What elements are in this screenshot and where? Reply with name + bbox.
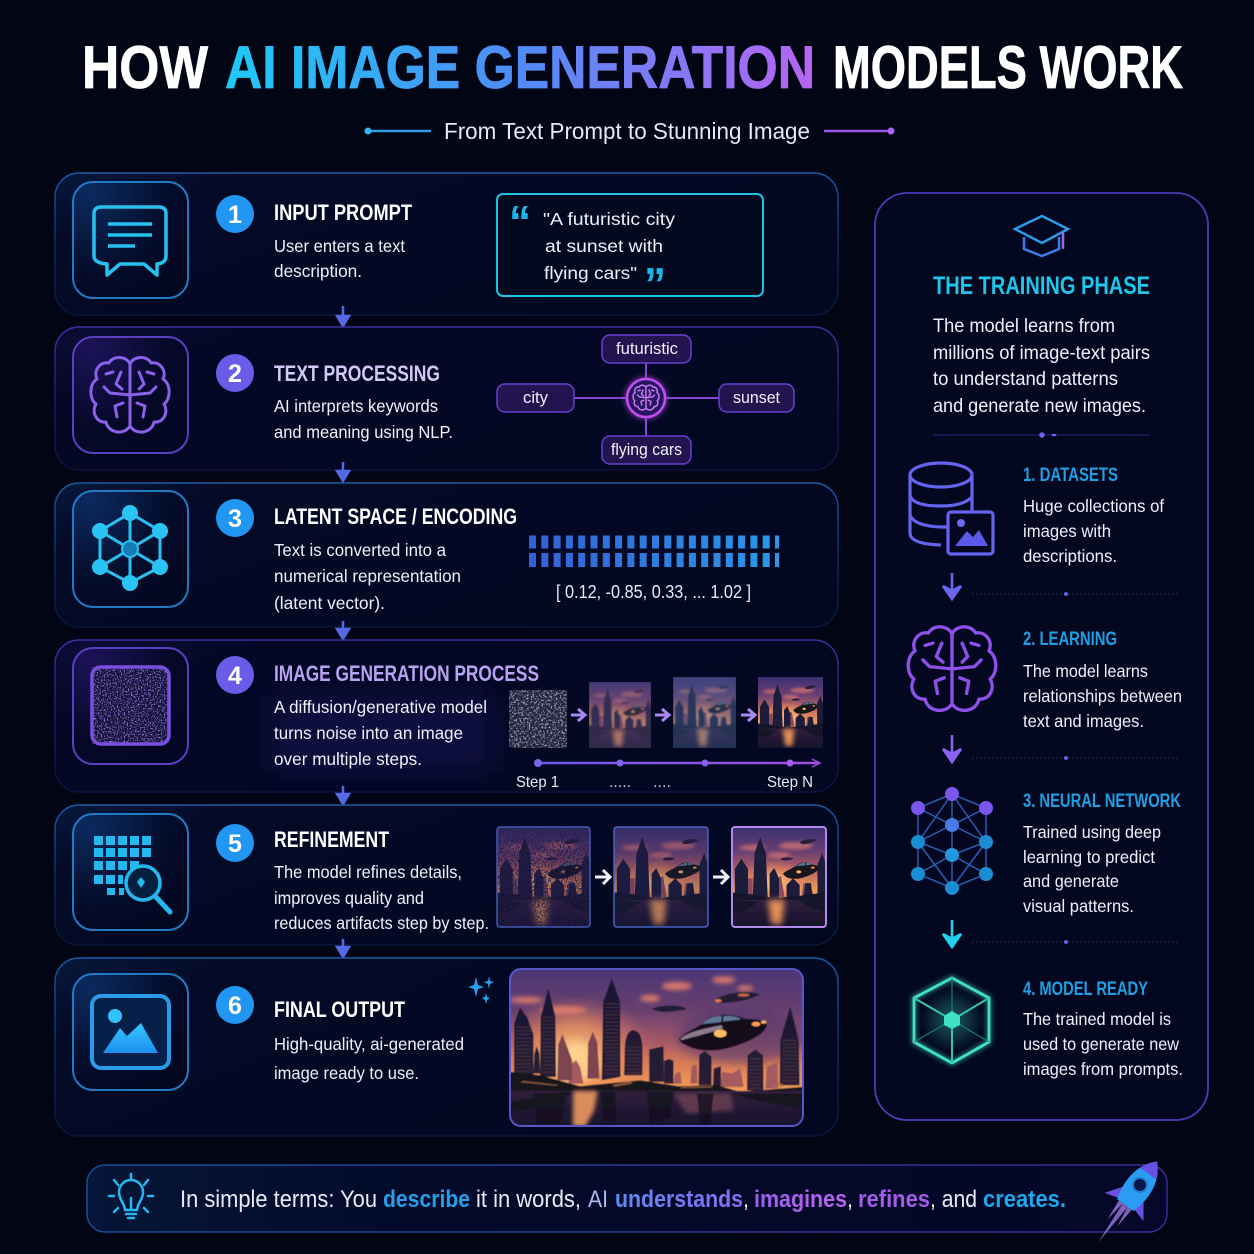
generation steps: Step N bbox=[767, 774, 813, 791]
panel: step 6 final output bbox=[55, 958, 838, 1140]
summary text: describe bbox=[383, 1186, 470, 1213]
number 6: 6 bbox=[228, 992, 242, 1020]
description: A diffusion/generative model bbox=[274, 697, 487, 717]
heading: image generation: IMAGE GENERATION PROCESS bbox=[274, 661, 539, 686]
icon: picture bbox=[73, 974, 188, 1090]
panel: step 1 input prompt bbox=[55, 173, 838, 315]
description: High-quality, ai-generated bbox=[274, 1034, 464, 1054]
number 3 bbox=[216, 499, 254, 537]
summary text: , bbox=[743, 1186, 749, 1213]
summary text: refines bbox=[858, 1186, 930, 1213]
summary text bbox=[180, 1186, 1066, 1213]
arrow 2 to 3 bbox=[337, 462, 349, 481]
description: description. bbox=[274, 261, 362, 281]
number 6 bbox=[216, 986, 254, 1024]
step: datasets: 1. DATASETS bbox=[1023, 465, 1118, 486]
heading: text processing: TEXT PROCESSING bbox=[274, 361, 440, 386]
description: The model refines details, bbox=[274, 862, 462, 882]
generation steps bbox=[509, 677, 823, 791]
prompt box: flying cars" bbox=[544, 263, 637, 283]
arrow: learning to neural network bbox=[943, 735, 961, 762]
step: neural network: visual patterns. bbox=[1023, 896, 1134, 916]
description: reduces artifacts step by step. bbox=[274, 913, 489, 933]
description: Text is converted into a bbox=[274, 540, 446, 560]
icon: brain bbox=[73, 337, 188, 453]
description bbox=[274, 697, 487, 769]
arrow 5 to 6 bbox=[337, 939, 349, 957]
icon: glowing cube bbox=[914, 978, 989, 1063]
subtitle: From Text Prompt to Stunning Image bbox=[444, 118, 810, 144]
summary text: it in words, bbox=[476, 1186, 581, 1213]
number 5 bbox=[216, 824, 254, 862]
keyword diagram bbox=[497, 335, 794, 464]
number 1 bbox=[216, 195, 254, 233]
icon: rocket bbox=[1079, 1147, 1176, 1254]
description: image ready to use. bbox=[274, 1063, 419, 1083]
icon: pixel grid with magnifier bbox=[73, 814, 188, 930]
step: datasets bbox=[1023, 465, 1164, 566]
training intro text: to understand patterns bbox=[933, 368, 1118, 390]
icon: chat bubble bbox=[73, 182, 188, 298]
title bbox=[82, 34, 1183, 101]
description: AI interprets keywords bbox=[274, 396, 438, 416]
step: learning: text and images. bbox=[1023, 711, 1144, 731]
icon: graduation cap bbox=[1015, 216, 1068, 256]
description: User enters a text bbox=[274, 236, 405, 256]
keyword diagram: city bbox=[523, 389, 549, 407]
keyword diagram: futuristic bbox=[616, 340, 678, 358]
number 2: 2 bbox=[228, 360, 242, 388]
arrow: datasets to learning bbox=[943, 573, 961, 599]
step: neural network: and generate bbox=[1023, 871, 1119, 891]
step: datasets: descriptions. bbox=[1023, 546, 1117, 566]
prompt box: ” bbox=[644, 258, 666, 310]
latent vector bars: [ 0.12, -0.85, 0.33, ... 1.02 ] bbox=[556, 582, 751, 602]
step: learning: relationships between bbox=[1023, 686, 1182, 706]
title: AI IMAGE GENERATION bbox=[225, 34, 815, 101]
panel: training phase bbox=[875, 193, 1208, 1120]
step: neural network bbox=[1023, 791, 1181, 916]
icon: database with image bbox=[910, 463, 993, 554]
step: datasets: images with bbox=[1023, 521, 1111, 541]
number 5: 5 bbox=[228, 830, 242, 858]
generation steps: ..... bbox=[609, 774, 631, 791]
step: model ready: 4. MODEL READY bbox=[1023, 979, 1148, 1000]
heading: latent space: LATENT SPACE / ENCODING bbox=[274, 504, 517, 529]
description: improves quality and bbox=[274, 888, 424, 908]
generation steps: Step 1 bbox=[516, 774, 559, 791]
summary text: , bbox=[847, 1186, 853, 1213]
keyword diagram: flying cars bbox=[611, 441, 682, 459]
number 2 bbox=[216, 354, 254, 392]
arrow 3 to 4 bbox=[337, 621, 349, 639]
panel: step 2 text processing bbox=[55, 327, 838, 470]
number 3: 3 bbox=[228, 505, 242, 533]
prompt box: at sunset with bbox=[545, 236, 663, 256]
refinement images bbox=[497, 827, 826, 927]
panel: step 5 refinement bbox=[55, 805, 838, 945]
arrow: neural network to model ready bbox=[943, 920, 961, 947]
heading: refinement: REFINEMENT bbox=[274, 827, 389, 852]
training intro text bbox=[933, 315, 1150, 417]
number 4 bbox=[216, 656, 254, 694]
panel: step 4 image generation bbox=[55, 640, 838, 792]
prompt box: “ bbox=[509, 196, 531, 248]
description: turns noise into an image bbox=[274, 723, 463, 743]
arrow 1 to 2 bbox=[337, 306, 349, 326]
arrow 4 to 5 bbox=[337, 786, 349, 804]
keyword diagram: sunset bbox=[733, 389, 780, 407]
step: model ready: The trained model is bbox=[1023, 1009, 1171, 1029]
prompt box bbox=[497, 194, 763, 310]
icon: lightbulb bbox=[109, 1174, 153, 1218]
heading: input prompt: INPUT PROMPT bbox=[274, 200, 412, 225]
icon: molecule network bbox=[73, 491, 188, 607]
training intro text: The model learns from bbox=[933, 315, 1115, 337]
training intro text: and generate new images. bbox=[933, 395, 1146, 417]
summary text: , and bbox=[930, 1186, 977, 1213]
description bbox=[274, 236, 405, 281]
panel: step 3 latent space bbox=[55, 483, 838, 627]
step: model ready: images from prompts. bbox=[1023, 1059, 1183, 1079]
icon: neural network bbox=[911, 787, 993, 895]
heading: the training phase: THE TRAINING PHASE bbox=[933, 272, 1150, 300]
icon: noise square bbox=[73, 648, 188, 764]
description: (latent vector). bbox=[274, 593, 385, 613]
title: HOW bbox=[82, 34, 208, 101]
summary text: In simple terms: You bbox=[180, 1186, 377, 1213]
summary banner bbox=[87, 1147, 1176, 1254]
icon: brain bbox=[908, 627, 996, 710]
number 4: 4 bbox=[228, 662, 242, 690]
summary text: understands bbox=[615, 1186, 743, 1213]
description: and meaning using NLP. bbox=[274, 422, 453, 442]
description: over multiple steps. bbox=[274, 749, 422, 769]
description bbox=[274, 396, 453, 442]
step: model ready: used to generate new bbox=[1023, 1034, 1179, 1054]
description bbox=[274, 862, 489, 933]
step: neural network: learning to predict bbox=[1023, 847, 1155, 867]
description: numerical representation bbox=[274, 566, 461, 586]
prompt box: "A futuristic city bbox=[543, 209, 675, 229]
description bbox=[274, 1034, 464, 1083]
summary text: imagines bbox=[754, 1186, 847, 1213]
step: neural network: Trained using deep bbox=[1023, 822, 1161, 842]
step: neural network: 3. NEURAL NETWORK bbox=[1023, 791, 1181, 812]
step: model ready bbox=[1023, 979, 1183, 1079]
step: learning: The model learns bbox=[1023, 661, 1148, 681]
description bbox=[274, 540, 461, 613]
final generated image bbox=[509, 968, 804, 1127]
step: learning bbox=[1023, 629, 1182, 731]
heading: final output: FINAL OUTPUT bbox=[274, 997, 405, 1022]
summary text: AI bbox=[588, 1186, 608, 1213]
training intro text: millions of image-text pairs bbox=[933, 342, 1150, 364]
step: learning: 2. LEARNING bbox=[1023, 629, 1117, 650]
generation steps: .... bbox=[653, 774, 671, 791]
icon: sparkles bbox=[468, 976, 494, 1004]
step: datasets: Huge collections of bbox=[1023, 496, 1164, 516]
summary text: creates. bbox=[983, 1186, 1066, 1213]
number 1: 1 bbox=[228, 201, 242, 229]
